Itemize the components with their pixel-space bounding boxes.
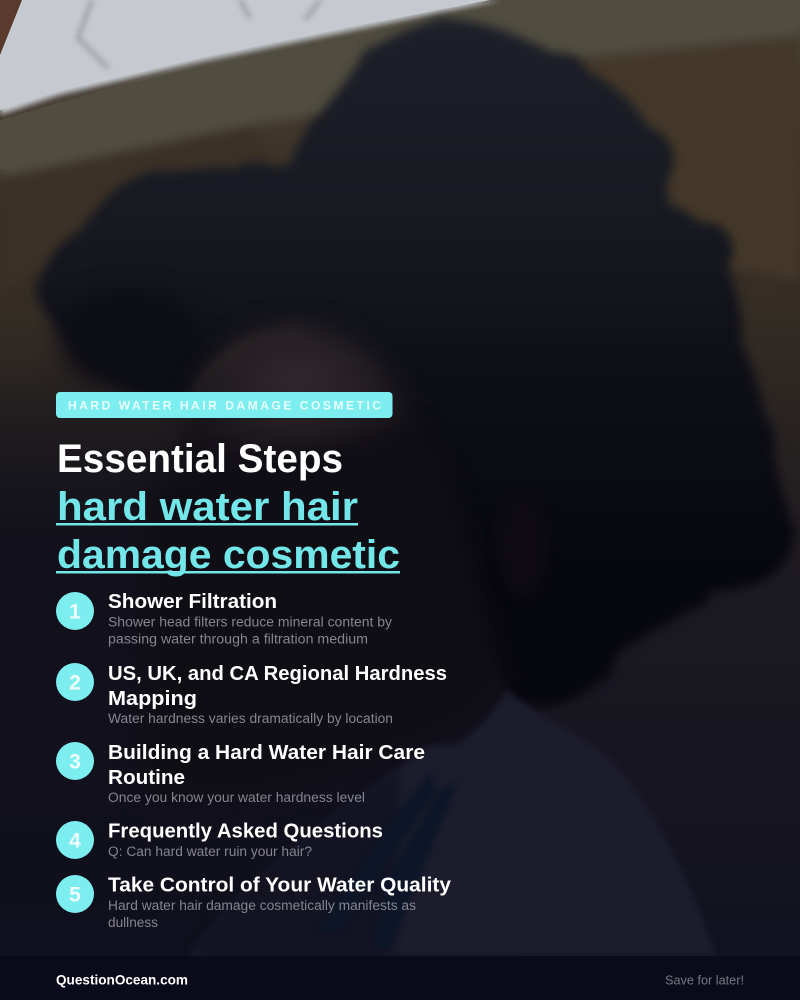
step 1 text: passing water through a filtration medium: [108, 632, 368, 646]
collar stripes: [316, 772, 458, 950]
step 4 text: Q: Can hard water ruin your hair?: [108, 844, 312, 859]
title: [56, 437, 400, 577]
title: Essential Steps: [57, 437, 343, 481]
step 2 number badge: [56, 663, 94, 701]
step 3 text: Once you know your water hardness level: [108, 790, 365, 805]
step 2 text: Water hardness varies dramatically by location: [108, 711, 393, 726]
step 3 number badge: 3: [69, 750, 81, 774]
hair: [36, 18, 795, 708]
step 1 text: Shower Filtration: [108, 591, 277, 613]
step 5: [56, 874, 452, 930]
step 2 text: US, UK, and CA Regional Hardness: [108, 663, 447, 685]
step 5 text: Hard water hair damage cosmetically manifests as: [108, 898, 416, 913]
step 5 number badge: [56, 875, 94, 913]
step 5 number badge: 5: [69, 884, 81, 906]
badge: topic tag: [56, 392, 392, 418]
footer brand: QuestionOcean.com: [56, 972, 188, 988]
step 4: [56, 820, 383, 859]
step 3 text: Building a Hard Water Hair Care: [108, 742, 425, 764]
step 5 text: [108, 874, 452, 930]
step 2 text: [108, 663, 447, 726]
sky: [0, 0, 500, 115]
wall ledge: [0, 0, 800, 170]
step 1 number badge: [56, 592, 94, 630]
shirt: [190, 690, 716, 956]
step 1 text: [108, 591, 392, 646]
step 4 text: [108, 820, 383, 859]
step 5 text: dullness: [108, 915, 158, 930]
ear: [496, 493, 548, 597]
step 1 number badge: 1: [69, 600, 81, 624]
title: damage cosmetic: [57, 533, 400, 577]
step 2 number badge: 2: [69, 672, 81, 694]
lower-left darkening behind the text: [0, 350, 520, 1000]
step 4 number badge: [56, 821, 94, 859]
badge: topic tag: HARD WATER HAIR DAMAGE COSMETIC: [68, 398, 381, 412]
face: [180, 322, 415, 482]
step 2 text: Mapping: [108, 688, 197, 710]
title: hard water hair: [57, 485, 358, 529]
step 4 number badge: 4: [69, 830, 81, 852]
step 4 text: Frequently Asked Questions: [108, 820, 383, 842]
step 5 text: Take Control of Your Water Quality: [108, 874, 452, 896]
step 2: [56, 663, 447, 726]
footer bar: [0, 956, 800, 1000]
step 3 text: Routine: [108, 767, 185, 789]
step 3: [56, 742, 425, 805]
step 3 number badge: [56, 742, 94, 780]
step 3 text: [108, 742, 425, 805]
footer save prompt: Save for later!: [665, 972, 744, 988]
step 1: [56, 591, 392, 646]
step 1 text: Shower head filters reduce mineral content by: [108, 614, 392, 630]
